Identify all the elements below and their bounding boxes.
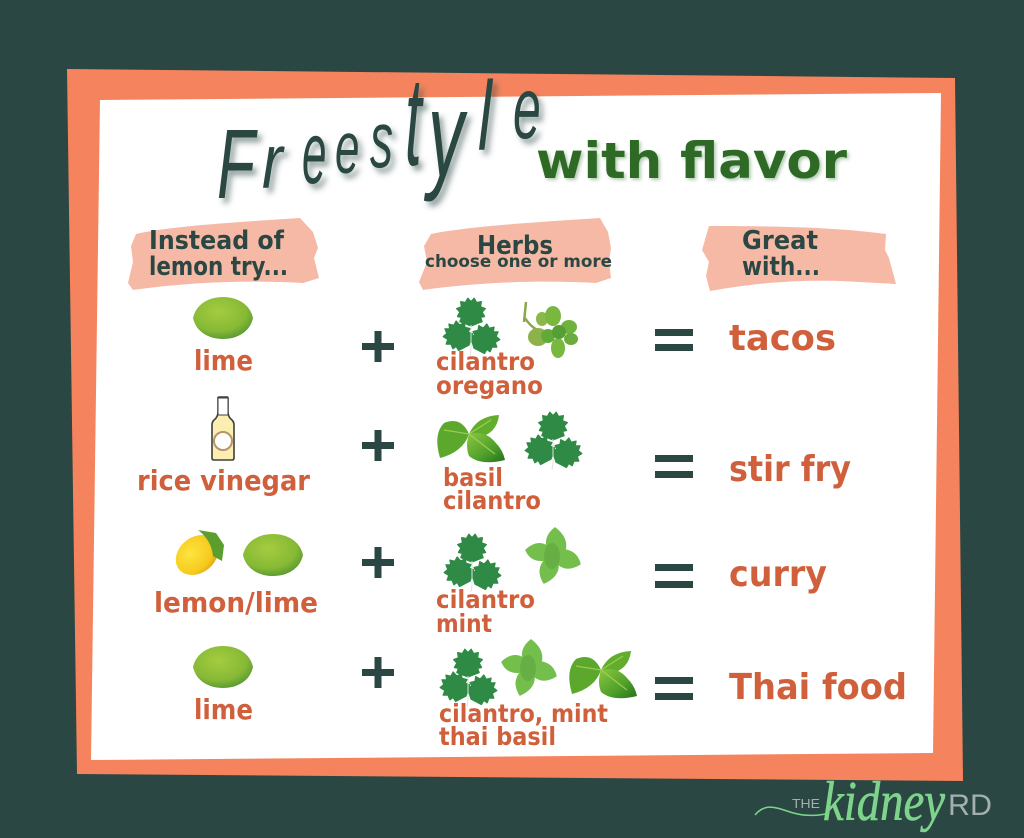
row 3 xyxy=(154,527,827,638)
plus xyxy=(362,331,394,362)
title: Freestyle: r xyxy=(262,119,285,205)
logo: The Kidney RD: RD xyxy=(948,789,992,822)
icon: oregano xyxy=(524,302,578,358)
label: basil cilantro: basil xyxy=(443,463,503,492)
label: cilantro, mint thai basil: thai basil xyxy=(439,722,556,751)
row 2 xyxy=(137,397,851,515)
icon: bottle xyxy=(212,397,234,460)
title: Freestyle: s xyxy=(370,95,393,184)
icon: lime xyxy=(193,297,253,339)
label: basil cilantro: cilantro xyxy=(443,486,541,515)
icon: mint xyxy=(502,640,556,695)
label: cilantro, mint thai basil xyxy=(439,699,608,751)
column header: Instead of lemon try: lemon try... xyxy=(149,252,288,282)
column header: Herbs: choose one or more xyxy=(425,252,612,272)
icon: cilantro xyxy=(520,412,587,473)
title: Freestyle: F xyxy=(217,111,258,220)
label: cilantro oregano: oregano xyxy=(436,371,543,400)
label: lime: lime xyxy=(194,693,253,726)
orange frame xyxy=(67,69,963,781)
equals xyxy=(655,455,693,478)
column header: Great with xyxy=(702,226,896,291)
column header: Great with: with... xyxy=(742,252,820,282)
column header: Herbs xyxy=(419,218,612,290)
label: cilantro oregano xyxy=(436,347,543,400)
column header: Instead of lemon try xyxy=(128,218,319,290)
title: Freestyle: t xyxy=(405,51,424,192)
label: cilantro mint: cilantro xyxy=(436,585,535,614)
icon: cilantro xyxy=(435,649,502,710)
icon: lime xyxy=(193,646,253,688)
equals xyxy=(655,329,693,351)
label: tacos: tacos xyxy=(729,318,836,359)
title: Freestyle xyxy=(217,51,541,220)
logo: The Kidney RD: kidney xyxy=(823,771,945,833)
label: cilantro mint: mint xyxy=(436,609,492,638)
plus xyxy=(362,657,394,688)
plus xyxy=(362,547,394,578)
plus xyxy=(362,430,394,461)
label: lemon/lime: lemon/lime xyxy=(154,586,318,619)
logo: The Kidney RD xyxy=(755,771,992,833)
label: lime: lime xyxy=(194,344,253,377)
label: Thai food: Thai food xyxy=(729,667,907,708)
title: Freestyle: e xyxy=(335,106,359,189)
icon: cilantro xyxy=(438,298,505,359)
label: curry: curry xyxy=(729,554,827,595)
column header: Great with: Great xyxy=(742,226,818,256)
icon: lime xyxy=(243,534,303,576)
title: Freestyle: e xyxy=(302,103,326,202)
icon: lemon xyxy=(168,527,226,583)
label: stir fry: stir fry xyxy=(729,449,851,490)
equals xyxy=(655,564,693,588)
white panel xyxy=(91,93,941,760)
title: Freestyle: e xyxy=(513,61,541,158)
icon: mint xyxy=(526,528,580,583)
label: cilantro, mint thai basil: cilantro, mint xyxy=(439,699,608,728)
row 4 xyxy=(193,640,907,751)
icon: thai basil xyxy=(569,651,637,698)
column header: Instead of lemon try: Instead of xyxy=(149,226,285,256)
column header: Herbs: Herbs xyxy=(477,231,553,261)
equals xyxy=(655,677,693,700)
logo: The Kidney RD: THE xyxy=(792,796,820,811)
row 1 xyxy=(193,297,836,400)
icon: cilantro xyxy=(439,534,506,595)
label: basil cilantro xyxy=(443,463,541,515)
title: with flavor: with flavor xyxy=(536,132,847,190)
label: cilantro mint xyxy=(436,585,535,638)
icon: basil xyxy=(437,415,505,462)
title: Freestyle: l xyxy=(478,63,494,172)
label: cilantro oregano: cilantro xyxy=(436,347,535,376)
title: Freestyle: y xyxy=(424,66,468,203)
label: rice vinegar: rice vinegar xyxy=(137,464,310,497)
